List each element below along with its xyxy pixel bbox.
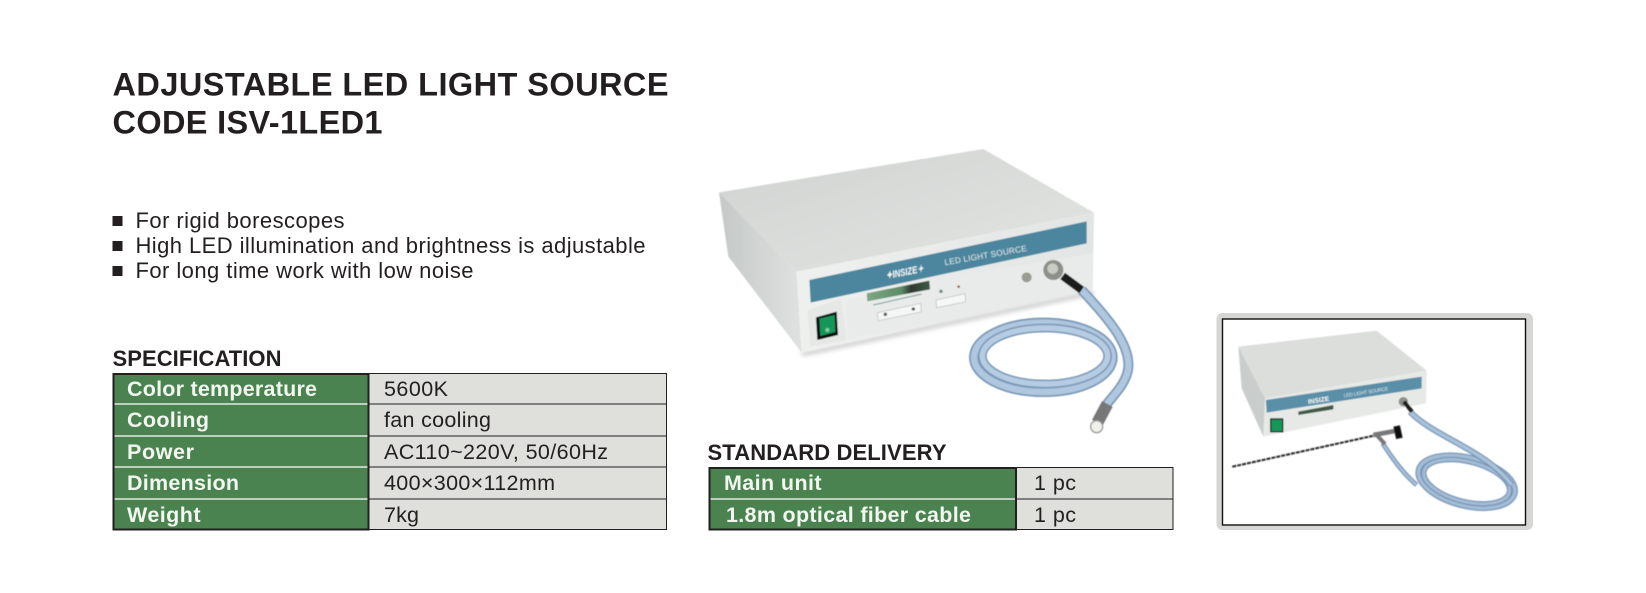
inset device body: INSIZE: [1308, 396, 1330, 406]
device top face: [719, 149, 1094, 272]
fiber optic cable: [974, 276, 1128, 407]
specification table: 7kg: [384, 503, 419, 527]
feature bullet list: For rigid borescopes: [136, 208, 344, 233]
specification table: fan cooling: [384, 408, 491, 432]
power switch: [807, 298, 847, 347]
inset device body: [1238, 331, 1427, 437]
specification table: Dimension: [127, 471, 239, 495]
photo frame with borescope setup: [1216, 313, 1533, 530]
standard delivery table: Main unit: [724, 471, 822, 495]
standard delivery table: [708, 467, 1174, 530]
feature bullet list: [112, 208, 646, 283]
device left side: [719, 192, 802, 353]
specification table: Color temperature: [127, 377, 317, 401]
standard delivery table: 1 pc: [1034, 503, 1076, 527]
standard delivery table: 1 pc: [1034, 471, 1076, 495]
inset device body: LED LIGHT SOURCE: [1343, 386, 1389, 399]
specification table: Cooling: [127, 408, 209, 432]
lower front panel: [845, 253, 1093, 339]
feature bullet list: For long time work with low noise: [136, 258, 474, 283]
standard delivery table: 1.8m optical fiber cable: [726, 503, 971, 527]
specification heading: SPECIFICATION: [112, 346, 282, 371]
title: [112, 66, 668, 140]
inset borescope: [1232, 426, 1399, 467]
specification table: AC110~220V, 50/60Hz: [384, 440, 608, 464]
standard delivery heading: STANDARD DELIVERY: [708, 440, 947, 465]
main product photo: LED light source with cable: [719, 149, 1128, 433]
specification table: Weight: [127, 503, 200, 527]
blue nameplate band: [809, 221, 1087, 303]
connector ports: [1022, 260, 1063, 282]
inset cable: [1383, 402, 1520, 517]
device soft shadow: [800, 290, 1095, 357]
specification table: 400×300×112mm: [384, 471, 555, 495]
title: CODE ISV-1LED1: [112, 104, 382, 140]
title: ADJUSTABLE LED LIGHT SOURCE: [112, 66, 668, 102]
control panel buttons: [877, 285, 966, 321]
device front face: [797, 213, 1094, 353]
nameplate logo: ✦INSIZE✦: [885, 264, 925, 282]
feature bullet list: High LED illumination and brightness is adjustable: [136, 233, 646, 258]
nameplate label: LED LIGHT SOURCE: [944, 243, 1028, 267]
cable tip connector: [1091, 404, 1107, 433]
specification table: [112, 373, 667, 530]
specification table: Power: [127, 440, 195, 464]
display window: [867, 281, 930, 301]
specification table: 5600K: [384, 377, 449, 401]
